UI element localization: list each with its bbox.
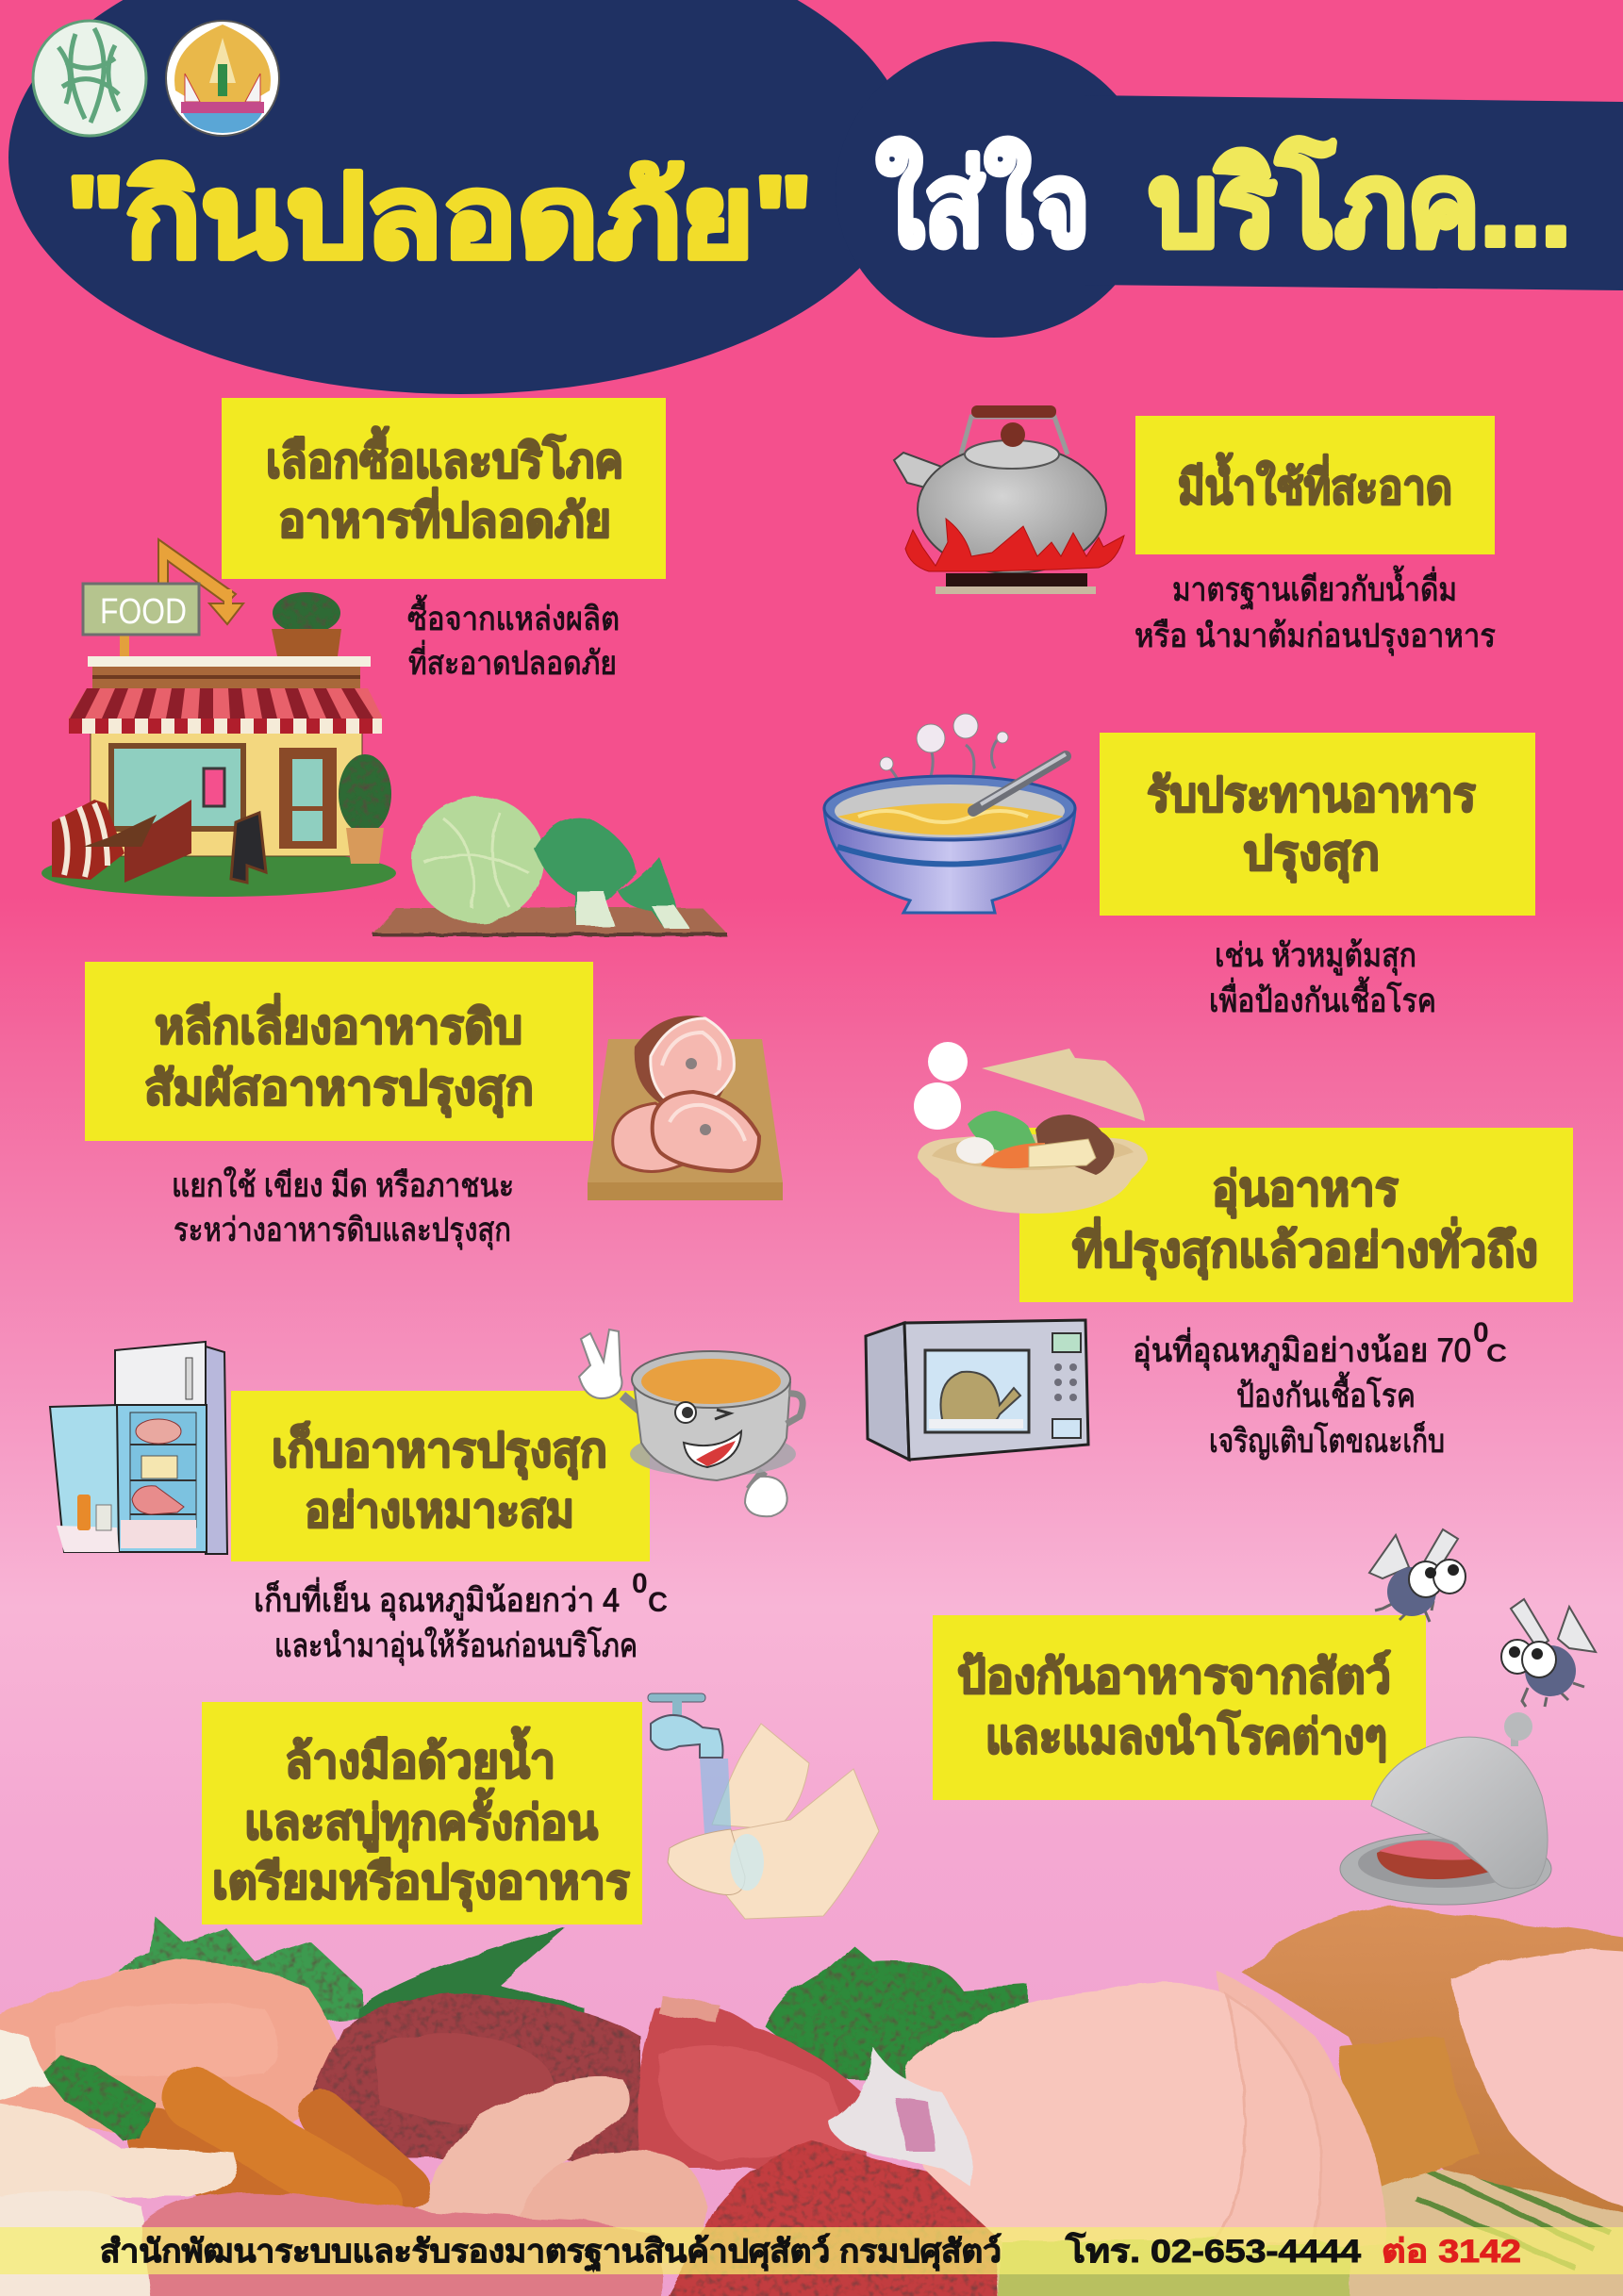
footer band — [0, 2227, 1623, 2274]
icon: food cloche — [1340, 1712, 1551, 1905]
icon: open fridge — [50, 1342, 227, 1554]
panel: avoid raw contact — [85, 962, 783, 1249]
text: keep cold below 4 C: 0 — [632, 1568, 648, 1599]
text: reheat at 70 C: C — [1486, 1339, 1507, 1367]
heading: protect from insects: และแมลงนำโรคต่างๆ — [985, 1709, 1387, 1763]
text: separate boards and knives: ระหว่างอาหารดิบและปรุงสุก — [174, 1212, 511, 1249]
heading: wash hands: ล้างมือด้วยน้ำ — [285, 1726, 555, 1788]
text: reheat at 70 C: ป้องกันเชื้อโรค — [1236, 1371, 1416, 1414]
heading: store food: เก็บอาหารปรุงสุก — [272, 1421, 607, 1479]
text: boil water — [1134, 565, 1496, 655]
parsley — [766, 1945, 1028, 2084]
heading: clean water — [1135, 416, 1495, 554]
title: บริโภค... — [1149, 138, 1571, 271]
text: reheat at 70 C: 0 — [1473, 1317, 1489, 1348]
panel: store food — [50, 1330, 803, 1665]
text: separate boards and knives: แยกใช้ เขียง มีด หรือภาชนะ — [172, 1166, 514, 1204]
orange sausages — [156, 2136, 278, 2216]
heading: reheat food: ที่ปรุงสุกแล้วอย่างทั่วถึง — [1072, 1217, 1538, 1280]
heading: wash hands: และสบู่ทุกครั้งก่อน — [244, 1788, 598, 1852]
text: boil water: หรือ นำมาต้มก่อนปรุงอาหาร — [1134, 618, 1496, 655]
text: boiled pork head example — [1209, 937, 1436, 1019]
text: reheat at 70 C — [1133, 1317, 1507, 1460]
text: keep cold below 4 C — [254, 1568, 668, 1665]
header banner — [8, 0, 1623, 394]
heading: protect from insects — [933, 1615, 1426, 1800]
logo: ministry seal — [166, 21, 279, 136]
icon: microwave — [866, 1320, 1088, 1460]
heading: eat cooked food — [1100, 733, 1535, 916]
icon: kettle on fire — [894, 405, 1124, 594]
logo: department seal — [33, 21, 146, 136]
text: buy from clean source — [407, 594, 620, 682]
heading: clean water: มีน้ำใช้ที่สะอาด — [1178, 453, 1452, 514]
icon: soup bowl — [824, 714, 1075, 913]
panel: reheat food — [866, 1042, 1573, 1460]
text: keep cold below 4 C: C — [648, 1587, 668, 1618]
panel: wash hands — [202, 1693, 879, 1924]
icon: faucet and hands — [648, 1693, 879, 1919]
title: ใส่ใจ — [876, 139, 1090, 271]
text: keep cold below 4 C: และนำมาอุ่นให้ร้อนก่อนบริโภค — [274, 1627, 638, 1665]
raw beef — [637, 2002, 868, 2169]
lettuce behind ham — [1000, 2216, 1349, 2296]
pale sausage — [415, 2077, 628, 2263]
icon: cartoon soup pot — [579, 1330, 803, 1516]
heading: reheat food: อุ่นอาหาร — [1212, 1163, 1399, 1218]
text: reheat at 70 C: เจริญเติบโตขณะเก็บ — [1209, 1421, 1445, 1460]
small parsley — [42, 2056, 156, 2140]
title: "กินปลอดภัย" — [66, 153, 813, 281]
icon: fly one — [1369, 1529, 1466, 1622]
heading: protect from insects: ป้องกันอาหารจากสัตว์ — [957, 1650, 1391, 1703]
footer band: โทร. 02-653-4444 — [1065, 2232, 1361, 2270]
text: boiled pork head example: เช่น หัวหมูต้มสุก — [1215, 937, 1416, 975]
chicken breast — [0, 1959, 341, 2131]
panel: eat cooked food — [824, 714, 1535, 1019]
icon: fly two — [1501, 1599, 1596, 1707]
title — [66, 138, 1571, 281]
icon: vegetables on board — [373, 797, 727, 936]
chicken leg — [0, 2101, 237, 2197]
panel: clean water — [894, 405, 1496, 655]
text: buy from clean source: ซื้อจากแหล่งผลิต — [407, 594, 620, 637]
ham slices — [1217, 1971, 1385, 2244]
photo: meat and vegetables collage — [0, 1908, 1623, 2296]
heading: reheat food — [1019, 1128, 1573, 1302]
panel: buy safe food — [41, 398, 727, 936]
heading: buy safe food: อาหารที่ปลอดภัย — [278, 487, 611, 547]
text: keep cold below 4 C: เก็บที่เย็น อุณหภูมิน้อยกว่า 4 — [254, 1577, 620, 1620]
icon: ham on cutting board — [588, 1016, 783, 1200]
panel: protect from insects — [933, 1529, 1596, 1905]
heading: avoid raw contact — [85, 962, 593, 1141]
heading: wash hands — [202, 1702, 642, 1924]
wood table — [981, 2169, 1623, 2296]
heading: eat cooked food: ปรุงสุก — [1243, 827, 1380, 883]
text: buy from clean source: ที่สะอาดปลอดภัย — [408, 640, 617, 682]
greens behind chicken — [104, 1917, 362, 2037]
heading: eat cooked food: รับประทานอาหาร — [1147, 768, 1476, 821]
footer band: สำนักพัฒนาระบบและรับรองมาตรฐานสินค้าปศุสัตว์ กรมปศุสัตว์ — [100, 2233, 1002, 2272]
text: separate boards and knives — [172, 1166, 514, 1249]
heading: wash hands: เตรียมหรือปรุงอาหาร — [212, 1856, 630, 1911]
text: boiled pork head example: เพื่อป้องกันเชื้อโรค — [1209, 976, 1436, 1019]
heading: store food: อย่างเหมาะสม — [305, 1484, 574, 1537]
dark beef — [310, 1993, 641, 2159]
text: boil water: มาตรฐานเดียวกับน้ำดื่ม — [1172, 565, 1457, 609]
heading: store food — [231, 1391, 650, 1561]
big ham right — [1240, 1908, 1623, 2216]
icon: clay hot pot — [914, 1042, 1148, 1214]
icon: food shop: FOOD — [100, 592, 187, 632]
text: reheat at 70 C: อุ่นที่อุณหภูมิอย่างน้อย 70 — [1133, 1328, 1471, 1370]
icon: food shop — [41, 539, 396, 897]
heading: buy safe food — [222, 398, 666, 579]
heading: avoid raw contact: สัมผัสอาหารปรุงสุก — [144, 1062, 534, 1117]
heading: avoid raw contact: หลีกเลี่ยงอาหารดิบ — [155, 994, 522, 1053]
pale chicken and pink meat — [0, 2189, 160, 2296]
heading: buy safe food: เลือกซื้อและบริโภค — [266, 426, 623, 487]
footer band: ต่อ 3142 — [1382, 2234, 1521, 2270]
ground meat — [660, 2140, 1000, 2296]
garlic — [830, 2046, 973, 2188]
